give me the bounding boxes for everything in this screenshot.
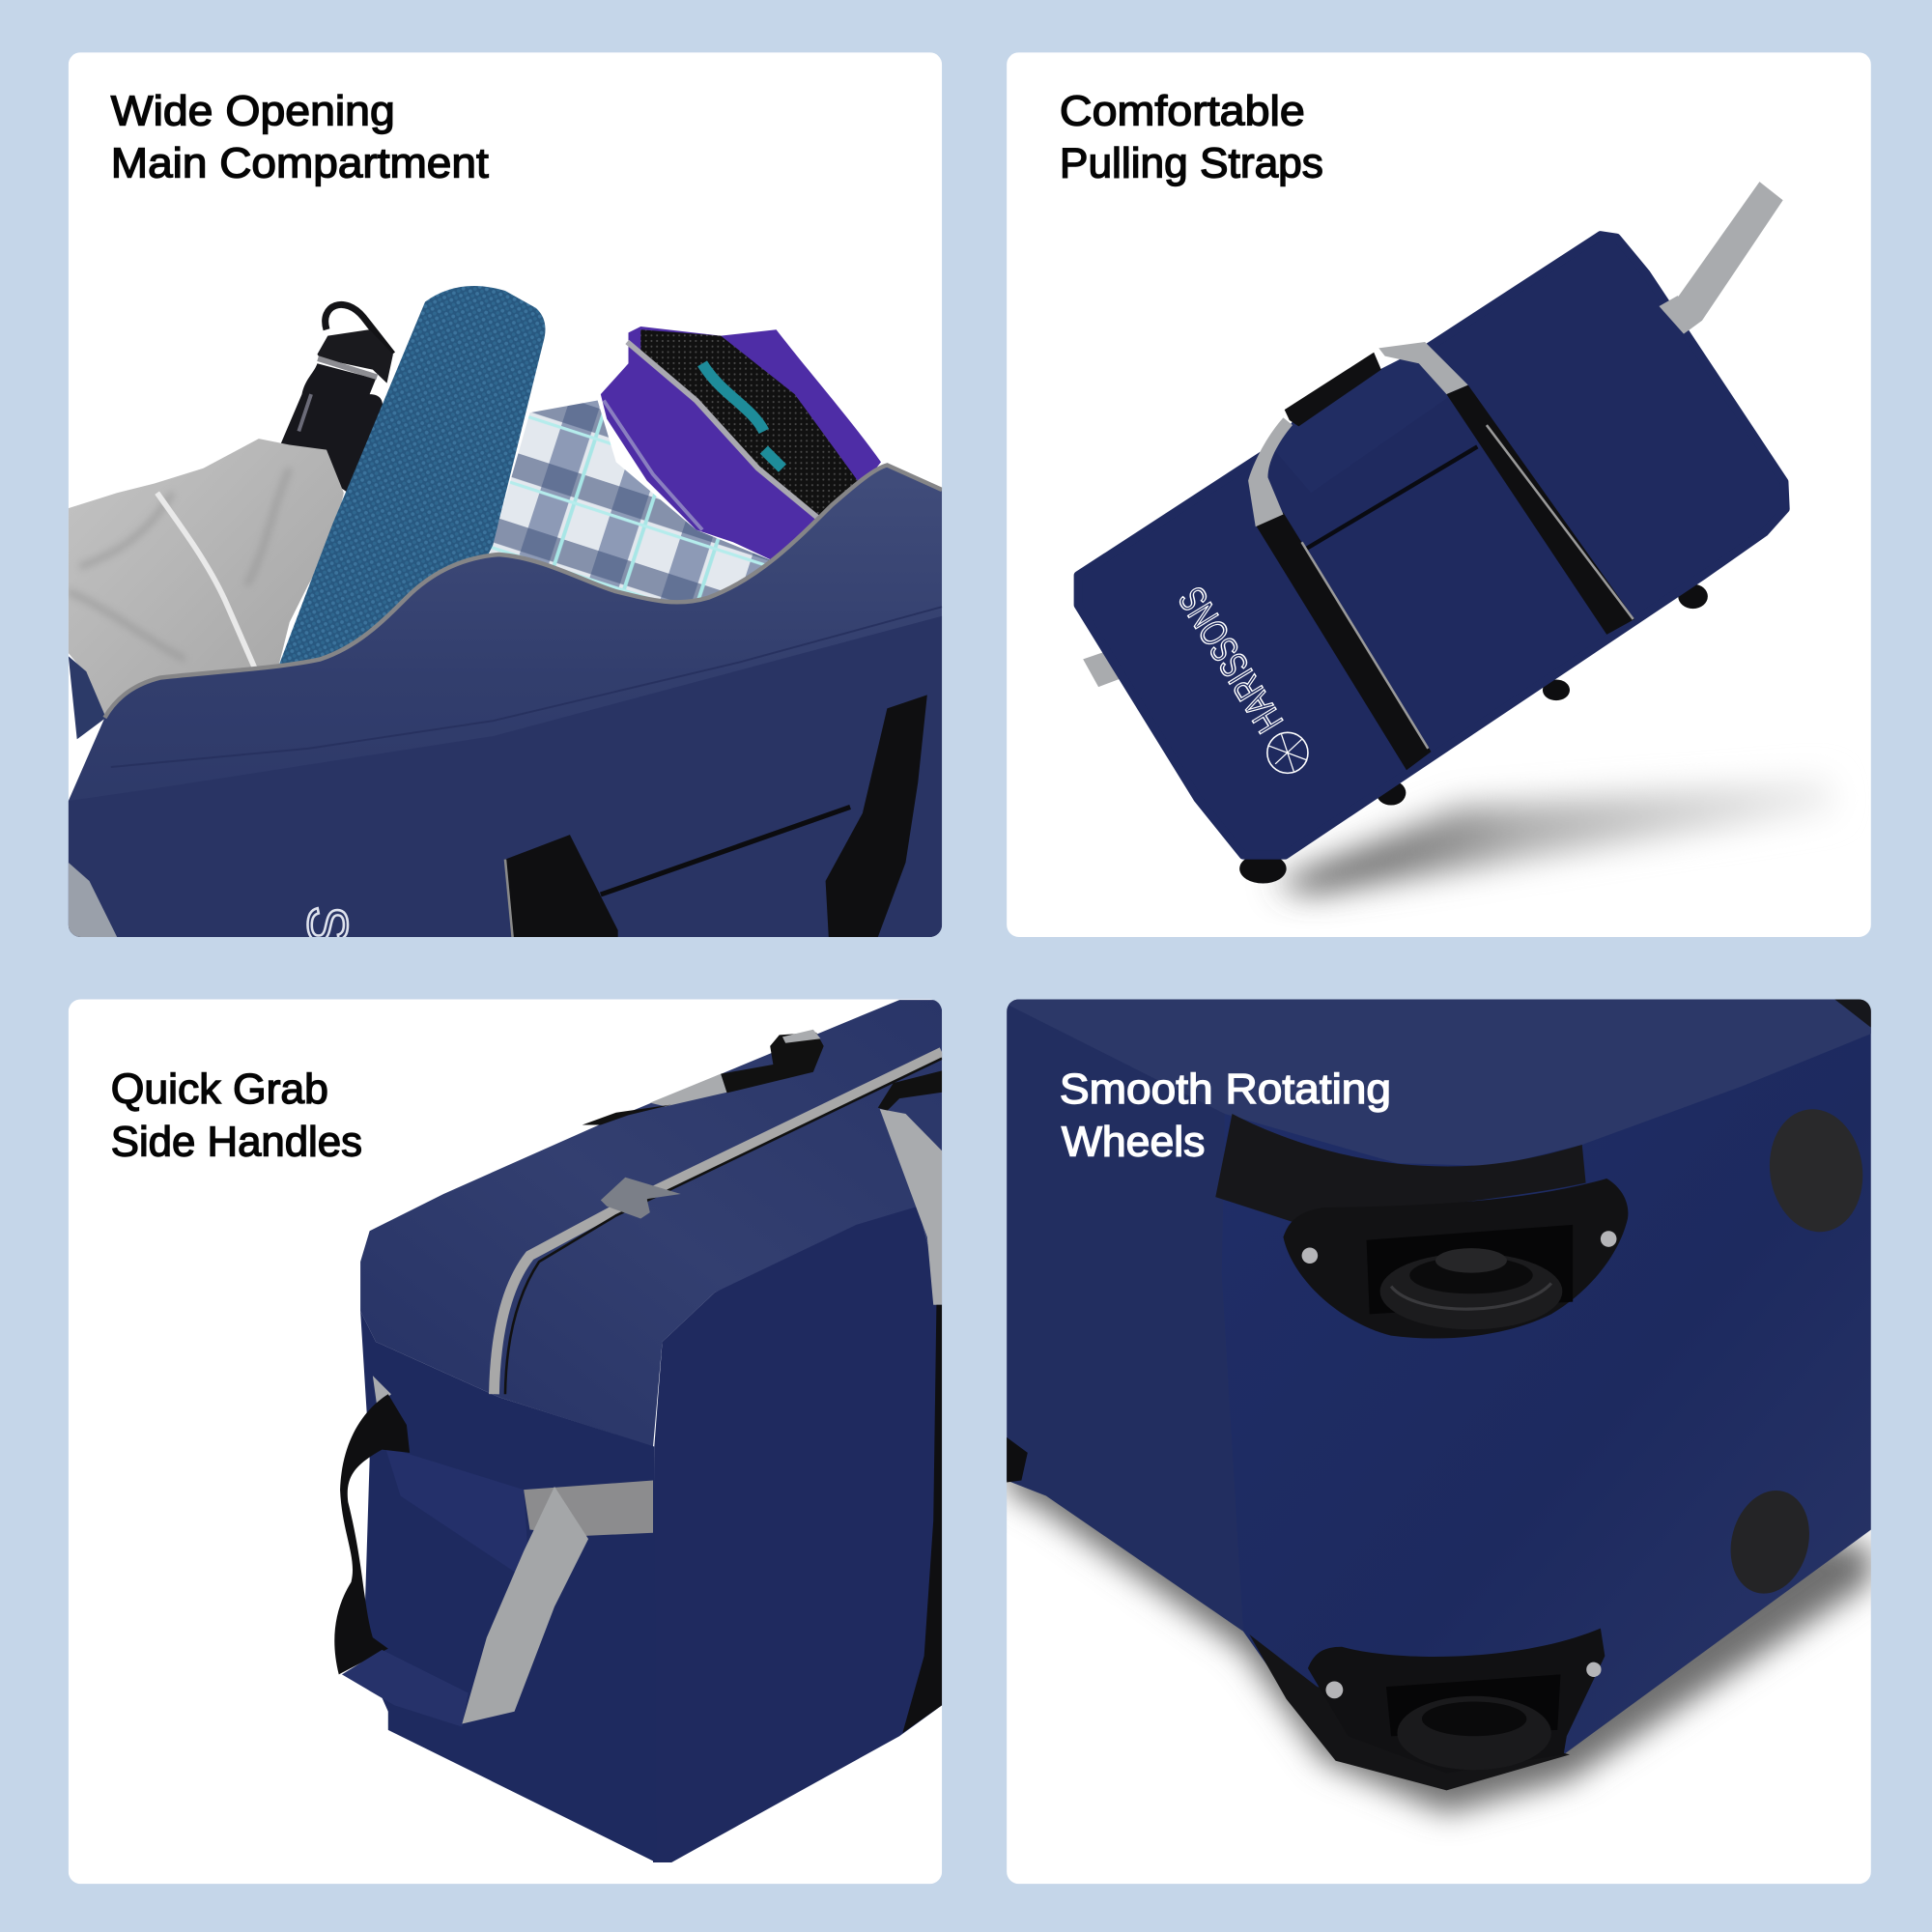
brand logo: [1171, 580, 1308, 773]
bag top surface: [1007, 999, 1871, 1166]
heading: Comfortable: [1060, 88, 1305, 134]
side handle anchor: [524, 1481, 653, 1536]
panel: smooth rotating wheels: [1007, 999, 1871, 1884]
bag right face: [1222, 1028, 1871, 1788]
panel: wide opening main compartment: [69, 52, 942, 944]
upper wheel assembly: [1283, 1179, 1628, 1339]
heading: [1060, 88, 1323, 187]
front flap: [386, 1451, 527, 1572]
zipper corner: [1834, 999, 1871, 1028]
upper right foot: [1762, 1103, 1870, 1238]
navy handle grip: [342, 1650, 469, 1727]
wheels: [1239, 584, 1708, 884]
gray folded item: [410, 570, 453, 607]
heading: Wide Opening: [111, 88, 395, 134]
logo letter: S: [296, 906, 358, 944]
navy bag body: [1078, 236, 1785, 855]
heading: Quick Grab: [111, 1066, 328, 1113]
heading: Pulling Straps: [1060, 141, 1323, 187]
black corner bumper: [1215, 1114, 1586, 1228]
side pull tab: [1083, 653, 1119, 688]
bag end face: [653, 1207, 942, 1862]
icon: water bottle: [280, 304, 393, 493]
lower right foot: [1719, 1482, 1821, 1603]
right carry strap: [878, 1070, 942, 1733]
heading: [111, 88, 489, 187]
left rear foot: [1007, 1437, 1028, 1482]
heading: [112, 1072, 361, 1157]
bag top surface: [360, 1000, 942, 1446]
heading: Side Handles: [111, 1119, 362, 1165]
floor shadow: [1007, 1459, 1871, 1813]
black handles: [505, 695, 927, 937]
lower wheel assembly: [1308, 1629, 1605, 1773]
heading: Wheels: [1062, 1119, 1205, 1165]
bag front panel: [360, 1311, 656, 1862]
shirt: [491, 400, 770, 601]
black handle section: [334, 1394, 410, 1674]
gray hoodie: [69, 439, 344, 739]
heading: Main Compartment: [111, 141, 489, 187]
gray anchor top: [373, 1376, 391, 1406]
floor shadow: [1274, 780, 1834, 894]
heading: [1060, 1066, 1391, 1165]
panel: quick grab side handles: [69, 999, 942, 1884]
carry straps: [1248, 342, 1634, 770]
pocket zipper: [601, 807, 850, 895]
gray handle section: [462, 1487, 588, 1723]
brand logo: HARISSONS: [1171, 580, 1292, 740]
strap base: [1659, 296, 1702, 334]
bag left face: [1007, 999, 1262, 1632]
rolled blue towel: [274, 286, 545, 678]
top pull strap: [1674, 182, 1783, 334]
heading: Smooth Rotating: [1060, 1066, 1391, 1113]
panel: comfortable pulling straps: [1007, 52, 1871, 937]
lower black bumper: [1249, 1634, 1570, 1790]
navy bag body: [69, 466, 942, 937]
front pocket zipper: [1305, 446, 1477, 550]
zipper pulls: [601, 1178, 681, 1218]
main zipper: [494, 1052, 942, 1394]
purple packing cube: [601, 327, 881, 568]
gray corner strap: [69, 863, 117, 937]
top carry handles: [582, 1030, 824, 1125]
